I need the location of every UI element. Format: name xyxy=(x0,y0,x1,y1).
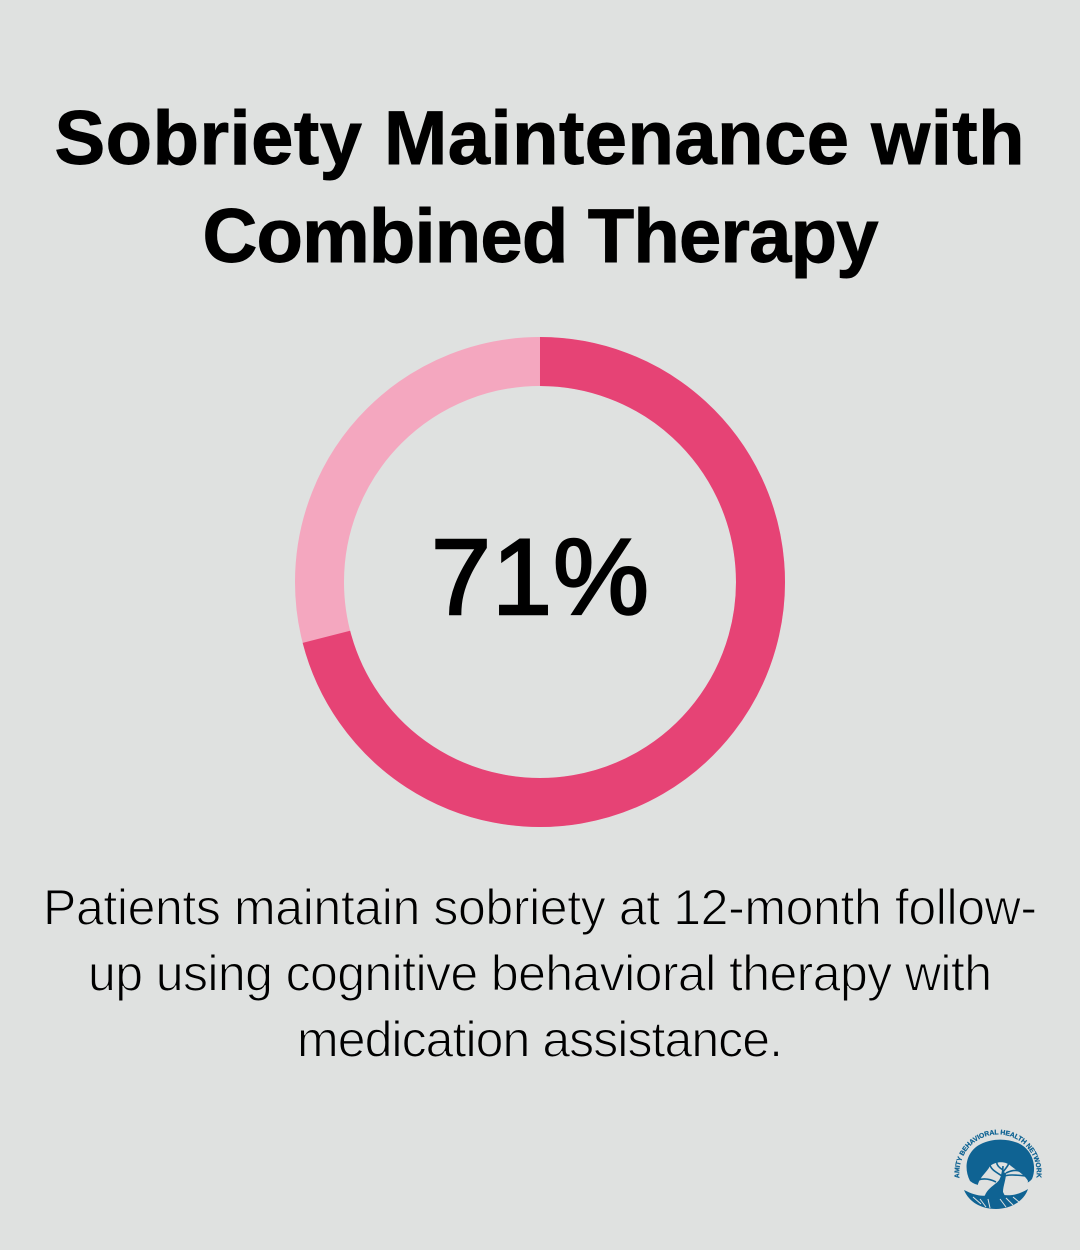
donut value segment xyxy=(326,362,760,802)
description text xyxy=(43,880,1037,1068)
description text: up using cognitive behavioral therapy with xyxy=(88,946,992,1002)
description text: medication assistance. xyxy=(297,1012,783,1068)
icon: tree branches xyxy=(978,1161,1026,1186)
icon: root crescent xyxy=(964,1189,1028,1209)
icon: roots xyxy=(973,1197,1019,1208)
title xyxy=(54,96,1024,279)
title: Sobriety Maintenance with xyxy=(54,96,1024,181)
icon: tree trunk xyxy=(984,1172,1006,1198)
icon: light gap under crown xyxy=(978,1162,1028,1192)
icon: tree crown xyxy=(967,1140,1034,1185)
donut remainder segment xyxy=(320,362,760,802)
title: Combined Therapy xyxy=(202,194,878,279)
center value: 71% xyxy=(431,516,649,637)
logo name text: AMITY BEHAVIORAL HEALTH NETWORK xyxy=(954,1130,1042,1178)
logo: Amity Behavioral Health Network xyxy=(954,1130,1042,1209)
donut chart: 71% xyxy=(320,362,760,802)
description text: Patients maintain sobriety at 12-month follow- xyxy=(43,880,1037,936)
